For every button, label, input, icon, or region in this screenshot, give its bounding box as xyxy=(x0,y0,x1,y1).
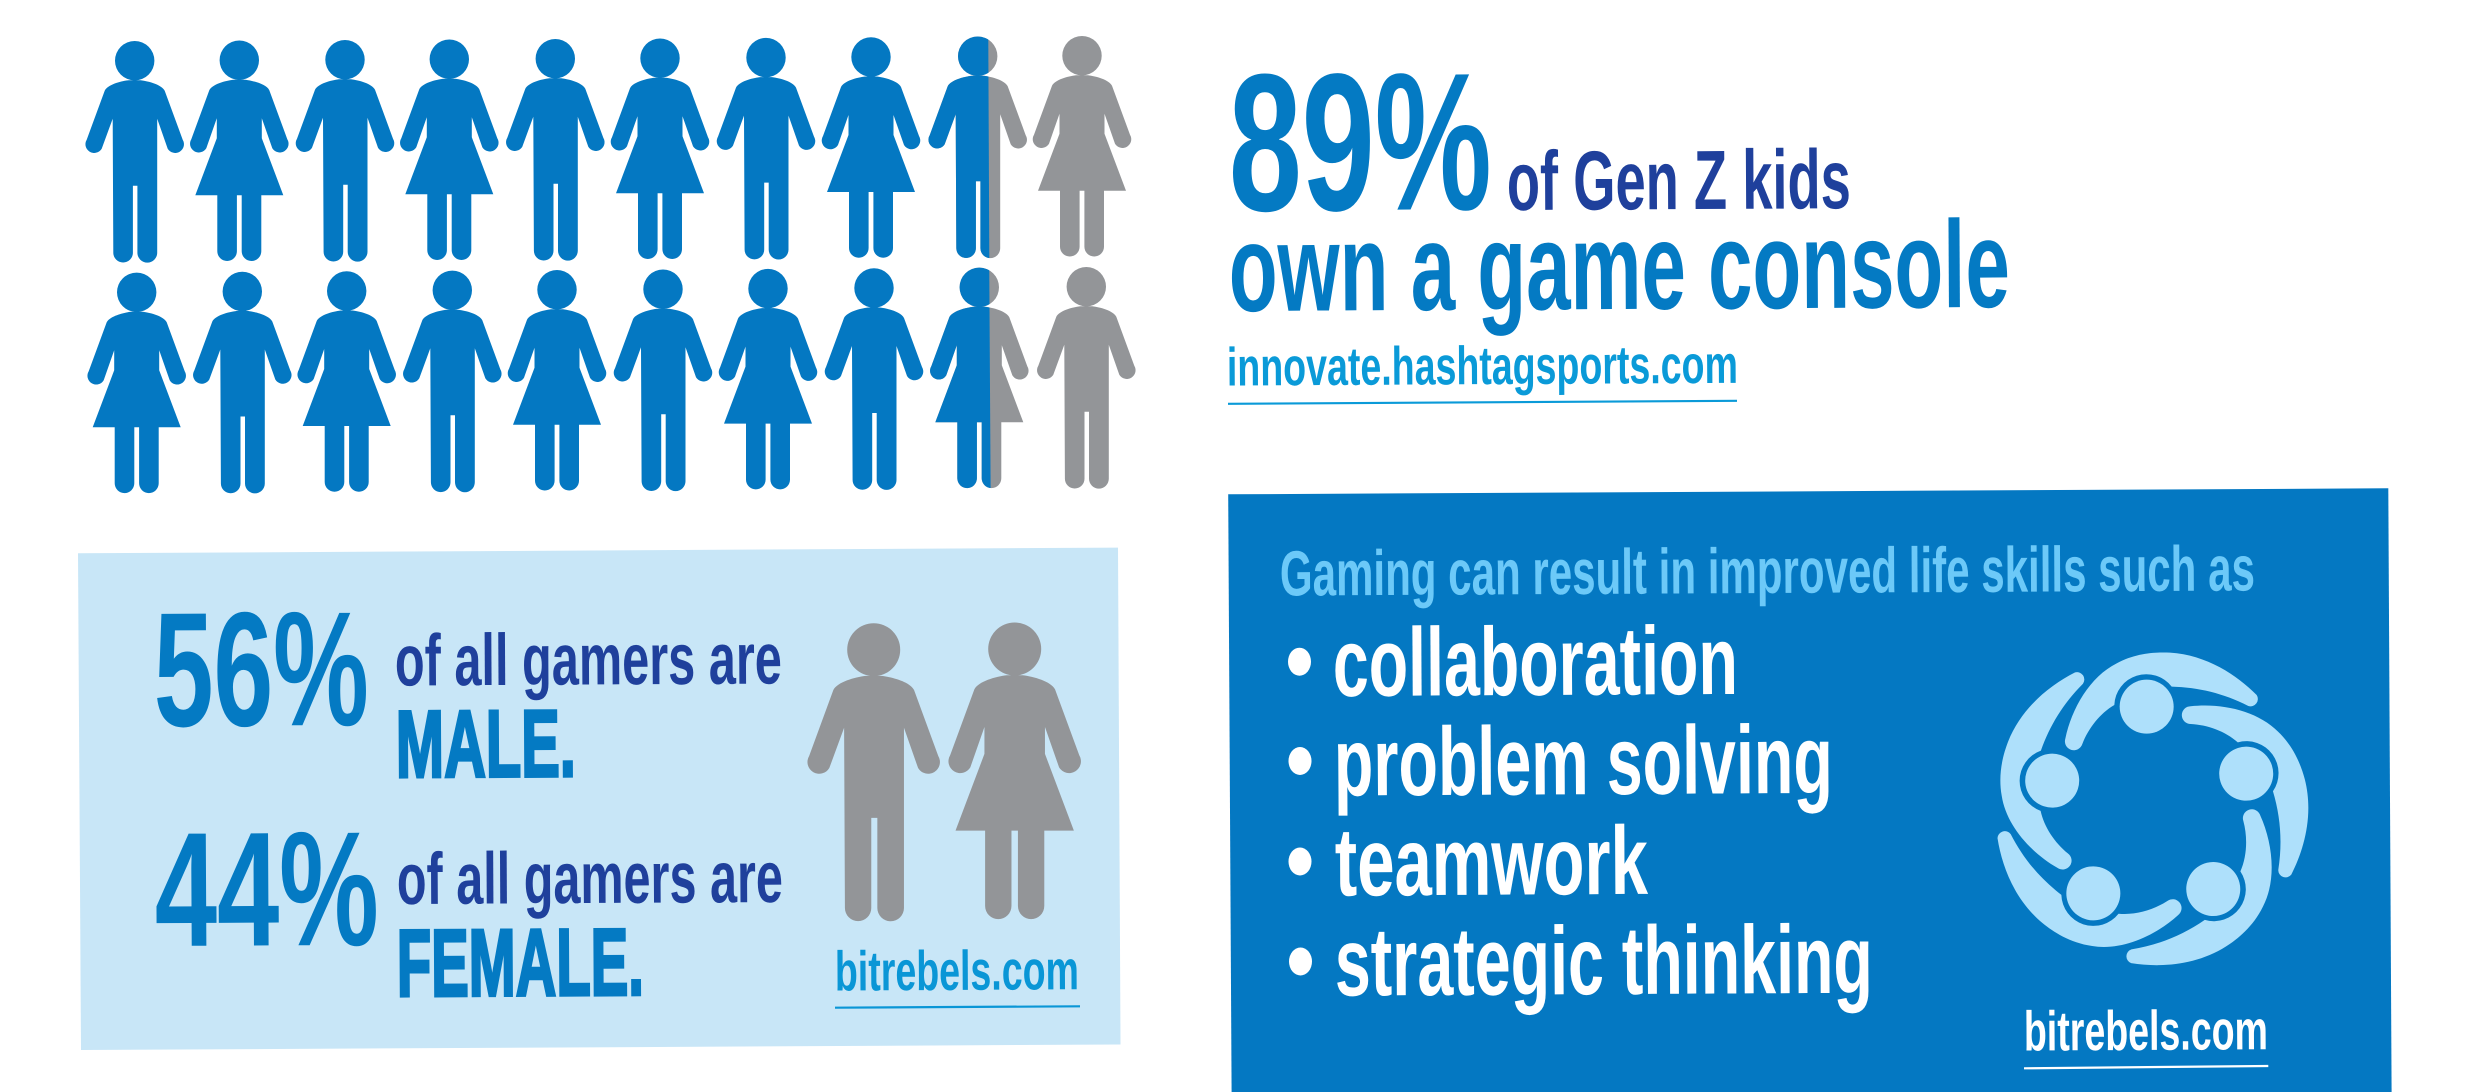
pictogram grid: 89 percent of people xyxy=(85,36,1136,493)
headline: 89 percent of Gen Z kids own a game console xyxy=(1227,32,2010,404)
source underline xyxy=(835,1006,1080,1008)
list item: collaboration xyxy=(1288,606,1738,717)
partly filled woman, row 2 xyxy=(930,268,1029,488)
list item: collaboration: collaboration xyxy=(1333,606,1738,717)
partly filled man, row 1 xyxy=(928,36,1027,258)
icon: five people in a circle xyxy=(1972,652,2332,998)
panel background xyxy=(78,548,1120,1050)
pictogram row 1 xyxy=(85,37,920,263)
text: own a game console: own a game console xyxy=(1228,196,2010,338)
source underline xyxy=(1228,401,1737,404)
panel background xyxy=(1228,488,2392,1092)
text: of all gamers are (male): of all gamers are xyxy=(395,618,782,701)
list item: teamwork xyxy=(1288,806,1649,916)
panel: life skills xyxy=(1228,488,2392,1092)
source: bitrebels.com: bitrebels.com xyxy=(2024,998,2268,1062)
grey man, row 2 xyxy=(1037,267,1136,489)
text: of Gen Z kids: of Gen Z kids xyxy=(1507,132,1851,228)
list item: problem solving xyxy=(1288,705,1833,816)
grey woman, row 1 xyxy=(1033,36,1131,256)
list item: teamwork: teamwork xyxy=(1335,806,1649,916)
list item: strategic thinking xyxy=(1289,905,1873,1016)
label: MALE: MALE. xyxy=(396,691,576,798)
stat: 44%: 44% xyxy=(154,797,379,981)
source underline xyxy=(2024,1066,2268,1068)
text: of all gamers are (female): of all gamers are xyxy=(397,837,783,920)
label: FEMALE: FEMALE. xyxy=(397,910,644,1017)
source: innovate.hashtagsports.com: innovate.hashtagsports.com xyxy=(1227,335,1738,397)
list item: strategic thinking: strategic thinking xyxy=(1335,905,1873,1016)
stat: 56%: 56% xyxy=(153,577,369,761)
list item: problem solving: problem solving xyxy=(1334,705,1833,816)
icon: grey man xyxy=(807,623,940,921)
big number 89%: 89% xyxy=(1228,32,1492,252)
source: bitrebels.com: bitrebels.com xyxy=(835,938,1079,1002)
icon: grey woman xyxy=(948,623,1081,919)
panel: gender split xyxy=(78,548,1120,1050)
pictogram row 2 xyxy=(87,268,923,493)
